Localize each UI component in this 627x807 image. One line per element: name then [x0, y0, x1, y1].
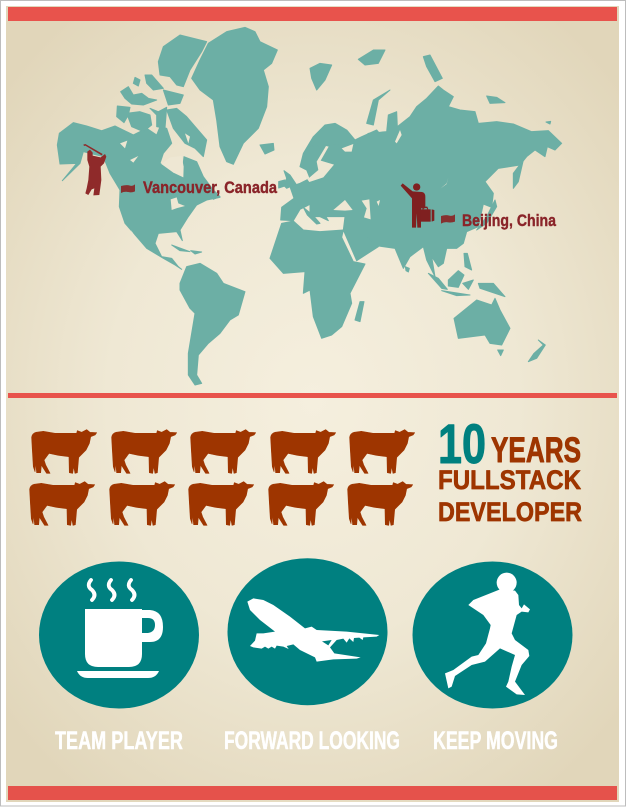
- marker: Beijing, China: [401, 183, 556, 230]
- label: keep moving: KEEP MOVING: [433, 727, 558, 755]
- world map: [57, 27, 562, 385]
- marker: Vancouver, Canada: [83, 144, 277, 197]
- Indonesia and Oceania islands: [428, 273, 447, 289]
- number 10: 10: [438, 412, 486, 475]
- icon: Canada flag: [121, 184, 135, 193]
- icon: runner: [445, 573, 530, 695]
- badge: keep moving: [412, 562, 572, 708]
- cow pictogram: ten cows: [30, 430, 415, 525]
- word FULLSTACK: FULLSTACK: [438, 465, 581, 495]
- word DEVELOPER: DEVELOPER: [438, 497, 582, 527]
- row 1 of cows: [32, 430, 415, 473]
- label: forward looking: FORWARD LOOKING: [224, 727, 400, 755]
- icon: coffee cup: [77, 580, 163, 678]
- label: team player: TEAM PLAYER: [55, 727, 183, 755]
- word YEARS: YEARS: [491, 431, 581, 470]
- teal circle: [228, 558, 388, 705]
- teal circle: [412, 562, 572, 708]
- top red bar: [8, 7, 617, 21]
- label: Vancouver, Canada: Vancouver, Canada: [143, 178, 277, 197]
- badge: team player: [39, 562, 199, 708]
- North America: [57, 35, 220, 269]
- label: Beijing, China: Beijing, China: [462, 211, 556, 230]
- Africa: [270, 221, 365, 338]
- middle red divider: [8, 393, 617, 398]
- badge: forward looking: [228, 558, 388, 705]
- row 2 of cows: [30, 482, 413, 525]
- icon: golfer: [83, 144, 106, 195]
- icon: airplane: [247, 598, 379, 662]
- bottom red bar: [8, 786, 617, 800]
- inland seas and bays: [120, 130, 448, 244]
- teal circle: [39, 562, 199, 708]
- icon: traveller with suitcase: [401, 183, 434, 228]
- Asia: [310, 50, 562, 362]
- Europe and western Russia: [279, 123, 385, 224]
- headline: 10 years fullstack developer: [438, 412, 582, 527]
- icon: China flag: [441, 214, 455, 224]
- Greenland and Iceland: [192, 27, 277, 164]
- South America: [180, 263, 245, 385]
